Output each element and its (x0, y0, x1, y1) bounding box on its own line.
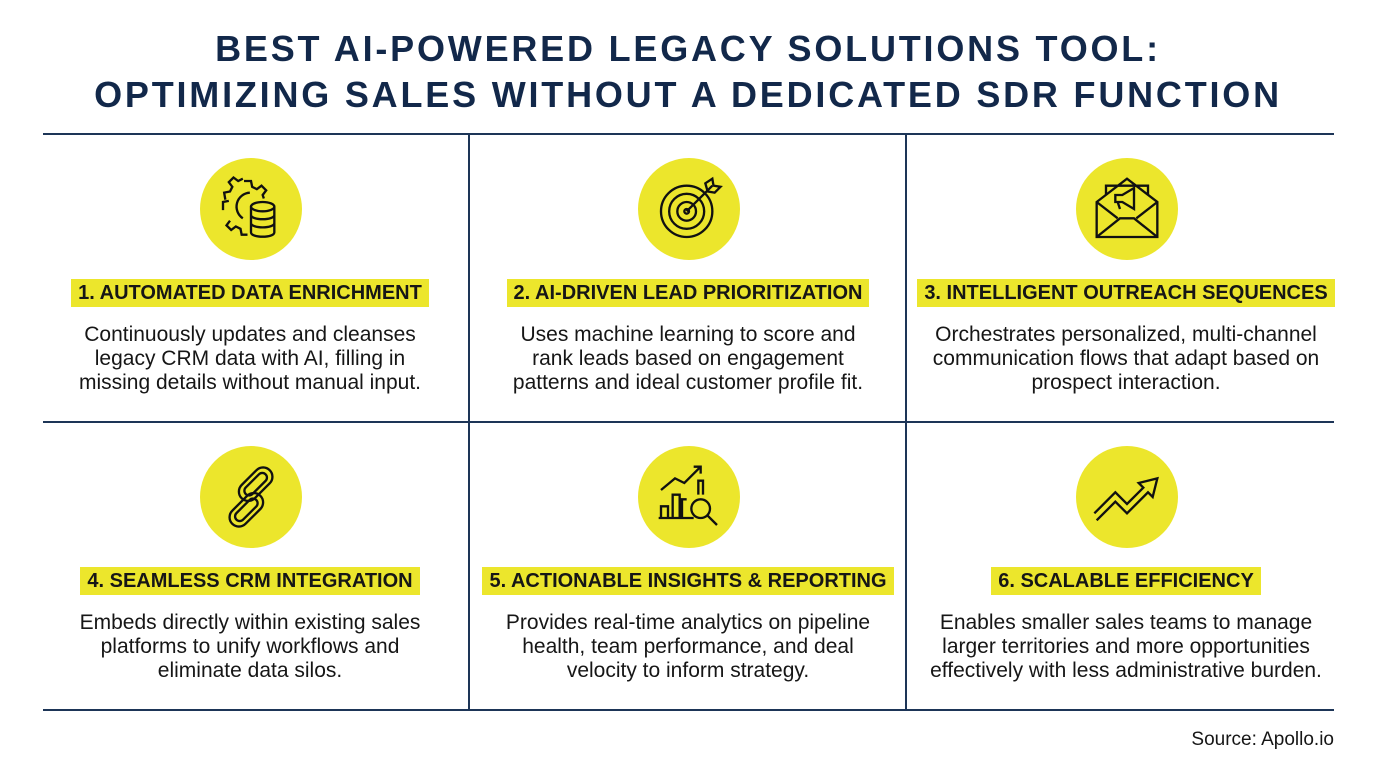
title: OPTIMIZING SALES WITHOUT A DEDICATED SDR FUNCTION (94, 74, 1282, 115)
icon: chain link (200, 446, 302, 548)
text: eliminate data silos. (158, 659, 342, 682)
text (506, 611, 870, 682)
text: health, team performance, and deal (522, 635, 854, 658)
icon: trend arrow (1076, 446, 1178, 548)
text (930, 611, 1322, 682)
title: BEST AI-POWERED LEGACY SOLUTIONS TOOL: (215, 28, 1161, 69)
text: prospect interaction. (1031, 371, 1221, 394)
text: Uses machine learning to score and (520, 323, 856, 346)
text: legacy CRM data with AI, filling in (95, 347, 405, 370)
icon: target (638, 158, 740, 260)
title (94, 28, 1282, 115)
panel: insights reporting (482, 446, 894, 682)
icon: gear database (200, 158, 302, 260)
text: Continuously updates and cleanses (84, 323, 416, 346)
text: velocity to inform strategy. (567, 659, 809, 682)
icon: envelope megaphone (1076, 158, 1178, 260)
text: effectively with less administrative burden. (930, 659, 1322, 682)
text (513, 323, 863, 394)
text: Enables smaller sales teams to manage (940, 611, 1312, 634)
label: 4. SEAMLESS CRM INTEGRATION (87, 570, 413, 592)
label: 6. SCALABLE EFFICIENCY (998, 570, 1254, 592)
label: 5. ACTIONABLE INSIGHTS & REPORTING (489, 570, 887, 592)
text: rank leads based on engagement (532, 347, 844, 370)
text: missing details without manual input. (79, 371, 421, 394)
panel: outreach sequences (917, 158, 1335, 394)
text (79, 323, 421, 394)
label: 3. INTELLIGENT OUTREACH SEQUENCES (924, 282, 1328, 304)
icon: chart magnifier (638, 446, 740, 548)
source: Source: Apollo.io (1191, 729, 1334, 750)
text: larger territories and more opportunities (942, 635, 1310, 658)
text (80, 611, 420, 682)
text: communication flows that adapt based on (933, 347, 1319, 370)
text: Embeds directly within existing sales (80, 611, 420, 634)
text (933, 323, 1319, 394)
panel: scalable efficiency (930, 446, 1322, 682)
label: 1. AUTOMATED DATA ENRICHMENT (78, 282, 422, 304)
text: Orchestrates personalized, multi-channel (935, 323, 1317, 346)
label: 2. AI-DRIVEN LEAD PRIORITIZATION (514, 282, 862, 304)
panel: lead prioritization (507, 158, 869, 394)
panel: automated data enrichment (71, 158, 429, 394)
panel: CRM integration (80, 446, 420, 682)
text: patterns and ideal customer profile fit. (513, 371, 863, 394)
text: platforms to unify workflows and (101, 635, 399, 658)
text: Provides real-time analytics on pipeline (506, 611, 870, 634)
